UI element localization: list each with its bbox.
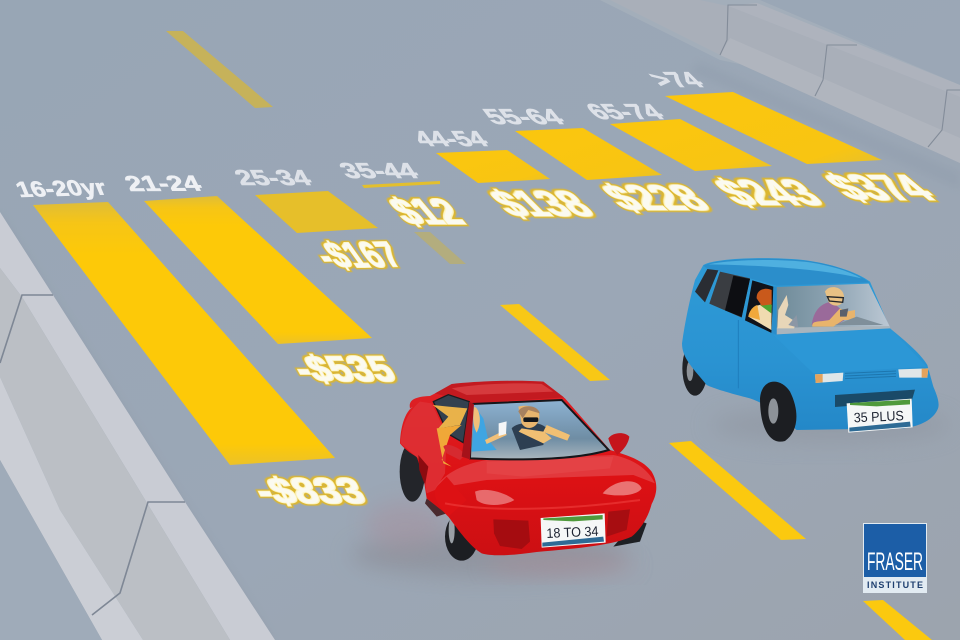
dollar values: $374 — [813, 168, 948, 208]
bar 21-24 — [144, 196, 372, 344]
hood upper panel — [435, 455, 655, 488]
dollar values: -$833 — [247, 470, 372, 511]
headlights — [815, 368, 928, 383]
bar 65-74 — [610, 119, 772, 171]
age labels — [12, 68, 711, 202]
grille — [845, 371, 896, 379]
licence plate: 18 TO 34 — [546, 524, 599, 541]
licence plate — [541, 513, 606, 548]
bar 44-54 — [436, 150, 550, 183]
wing mirrors — [608, 433, 629, 455]
air intake — [835, 390, 915, 407]
dollar values: -$167 — [305, 234, 411, 276]
age labels: >74 — [642, 68, 711, 92]
passenger — [433, 405, 507, 467]
left concrete barrier — [0, 212, 275, 640]
age labels: 16-20yr — [12, 176, 111, 202]
bar 55-64 — [515, 128, 662, 180]
bar 25-34 — [255, 191, 378, 233]
age labels: 55-64 — [477, 105, 571, 129]
wheels — [682, 341, 708, 396]
hood lights — [475, 490, 514, 505]
nose left flank — [435, 477, 467, 517]
roof — [703, 258, 869, 286]
dollar values: -$535 — [286, 350, 402, 389]
side window — [433, 395, 469, 443]
right concrete barrier — [600, 0, 960, 190]
driver — [512, 406, 570, 450]
windshield — [470, 400, 609, 459]
dollar values: $228 — [590, 177, 721, 218]
van body — [682, 258, 939, 430]
age labels: 44-54 — [408, 127, 494, 151]
bar 35-44 — [362, 181, 440, 188]
car shadows — [350, 407, 950, 577]
age labels: 35-44 — [334, 158, 424, 183]
dollar values: $243 — [702, 172, 834, 213]
logo: Fraser Institute: INSTITUTE — [867, 580, 923, 590]
age labels: 25-34 — [230, 166, 316, 190]
bumper — [445, 500, 640, 509]
hood — [773, 328, 927, 373]
bar >74 — [665, 92, 882, 164]
age labels: 21-24 — [120, 171, 206, 196]
licence plate: 35 PLUS — [853, 408, 904, 425]
blue van — [682, 258, 939, 442]
licence plate — [847, 399, 913, 433]
dollar values: $138 — [478, 183, 605, 224]
car body — [400, 381, 656, 555]
roof — [435, 381, 564, 403]
windshield — [777, 284, 890, 334]
logo: Fraser Institute — [863, 523, 927, 593]
age labels: 65-74 — [579, 99, 671, 124]
side windows — [695, 269, 773, 333]
dollar values: $12 — [379, 191, 474, 232]
driver — [777, 287, 883, 328]
dollar values — [247, 168, 948, 511]
bar 16-20yr — [33, 202, 335, 465]
door seams — [737, 320, 740, 388]
front wheel — [760, 382, 796, 442]
side panel shading — [401, 402, 447, 493]
red sports car — [400, 381, 656, 561]
road centre dashes — [166, 31, 932, 640]
wheels — [400, 442, 647, 561]
window pillar — [771, 287, 777, 334]
pillars — [462, 402, 474, 459]
passenger in back — [748, 289, 772, 330]
bar chart: insurance value by age — [33, 92, 882, 465]
